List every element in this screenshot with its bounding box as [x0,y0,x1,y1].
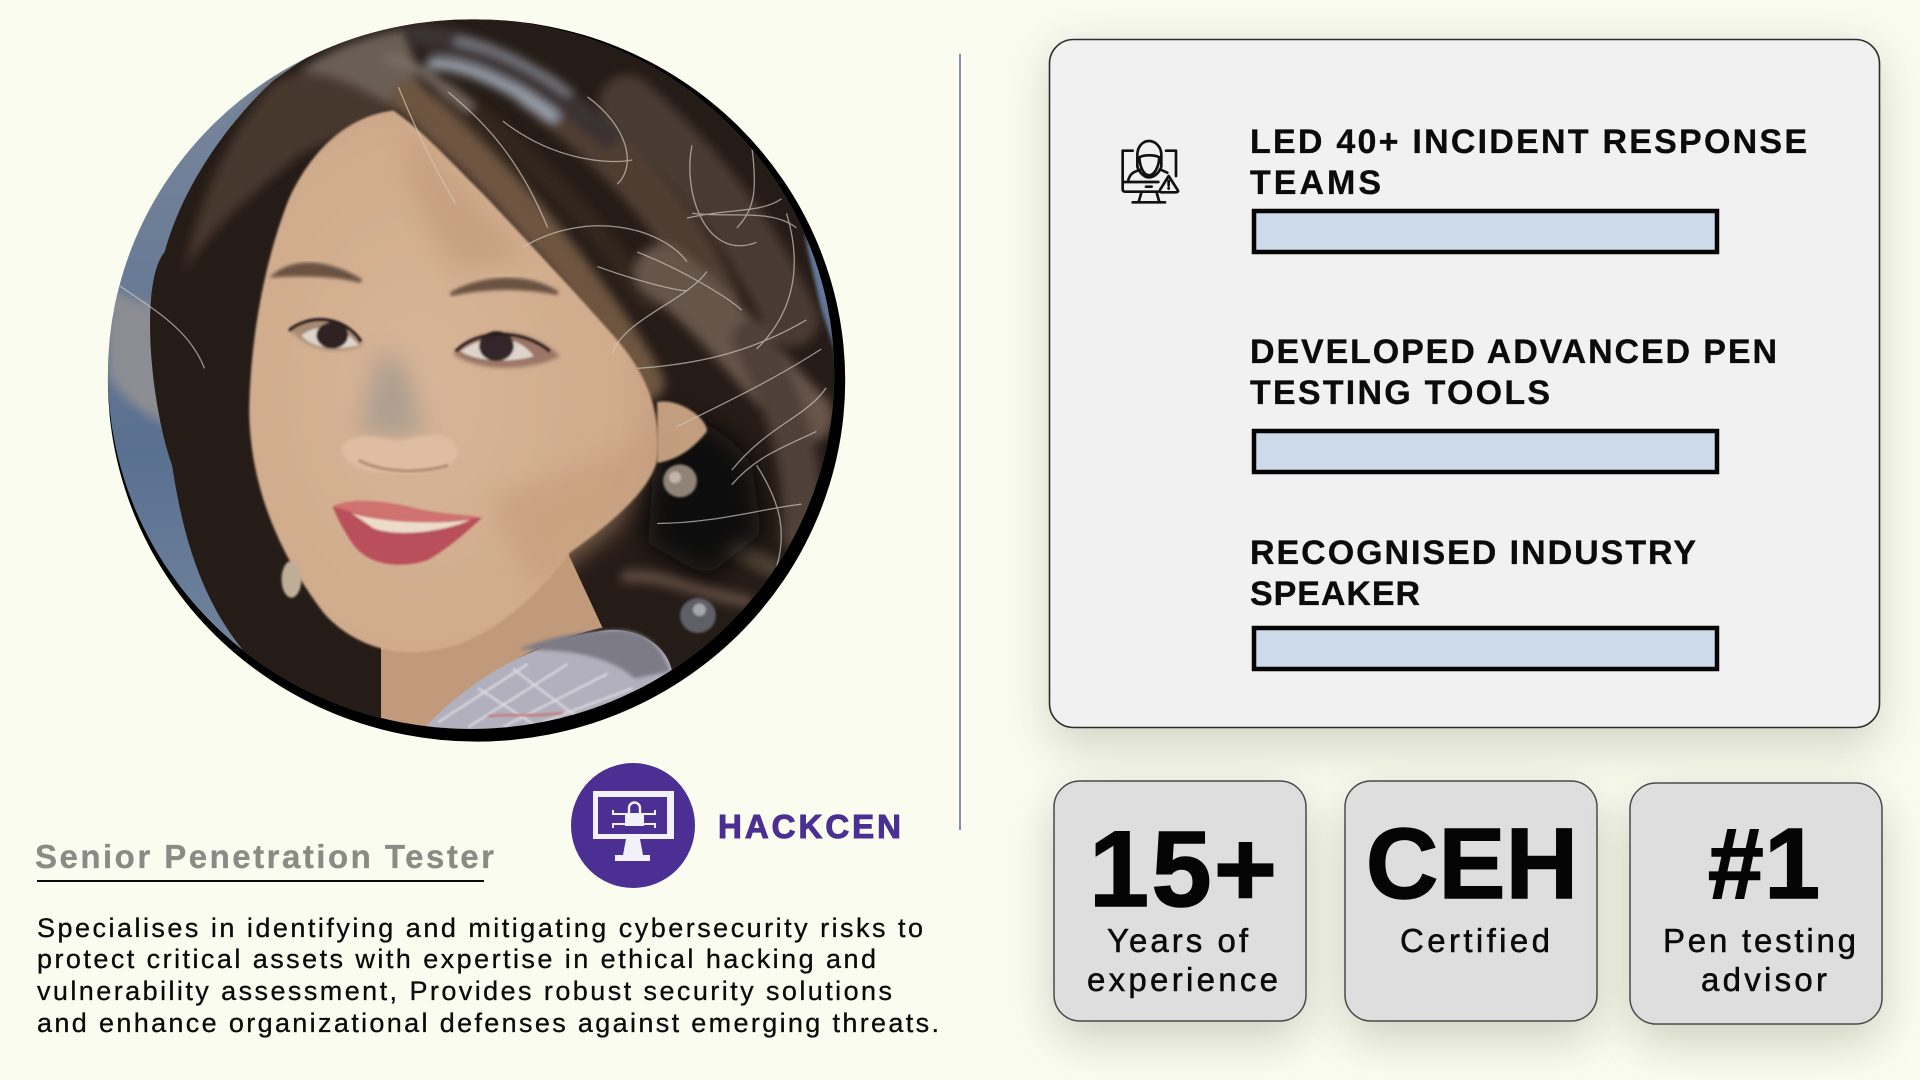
portrait image [108,19,834,729]
forehead shading [403,126,528,271]
stat card: years of experience: 15+ [1089,808,1277,929]
left eyebrow [275,265,361,281]
job title: Senior Penetration Tester [35,838,494,875]
bio paragraph: Specialises in identifying and mitigating cybersecurity risks to [37,913,923,943]
photo offset black ring [108,19,845,742]
stat card: pen testing advisor: #1 [1708,808,1820,920]
stat card: pen testing advisor: Pen testing [1663,922,1856,959]
achievement 2 [1250,333,1777,472]
cheek shading [498,460,657,574]
stat card: pen testing advisor: advisor [1701,961,1827,998]
bio paragraph: vulnerability assessment, Provides robust security solutions [37,976,892,1006]
icon: hooded hacker at monitor [1123,141,1178,202]
stat card: years of experience [1054,781,1306,1038]
left earring [282,561,301,598]
stat card: years of experience: experience [1087,961,1278,998]
stat card: years of experience: Years of [1107,922,1249,959]
nose shadow [359,349,438,437]
right eyebrow [451,280,558,294]
stat card: CEH certified: Certified [1400,922,1550,959]
achievement 3: SPEAKER [1250,575,1420,613]
loose hair strands [120,87,826,567]
achievement 1: LED 40+ INCIDENT RESPONSE [1250,123,1807,161]
stat card: CEH certified: CEH [1366,808,1578,920]
logo: HACKCEN [571,763,901,888]
ear [657,402,707,463]
vertical divider [959,54,961,830]
logo badge [571,763,695,888]
stat card: CEH certified [1345,781,1597,1038]
face [249,111,658,652]
stat card: pen testing advisor [1630,783,1882,1041]
nose [341,435,458,473]
achievement 2: TESTING TOOLS [1250,374,1550,412]
bio paragraph: and enhance organizational defenses against emerging threats. [37,1008,939,1038]
left eye [289,320,363,350]
lower earring [680,598,716,633]
lips [333,501,482,565]
bio paragraph [37,913,939,1038]
logo name: HACKCEN [718,808,901,845]
bio paragraph: protect critical assets with expertise in ethical hacking and [37,944,876,974]
panel: achievements [1049,40,1880,749]
right earring [663,464,697,497]
collar [421,630,672,738]
neck [381,553,602,732]
portrait photo [90,0,866,756]
right eye [453,331,560,368]
achievement 3: RECOGNISED INDUSTRY [1250,534,1696,572]
achievement 1: TEAMS [1250,164,1381,202]
achievement 3 [1250,534,1717,669]
achievement 1 [1250,123,1807,252]
achievement 2: DEVELOPED ADVANCED PEN [1250,333,1777,371]
